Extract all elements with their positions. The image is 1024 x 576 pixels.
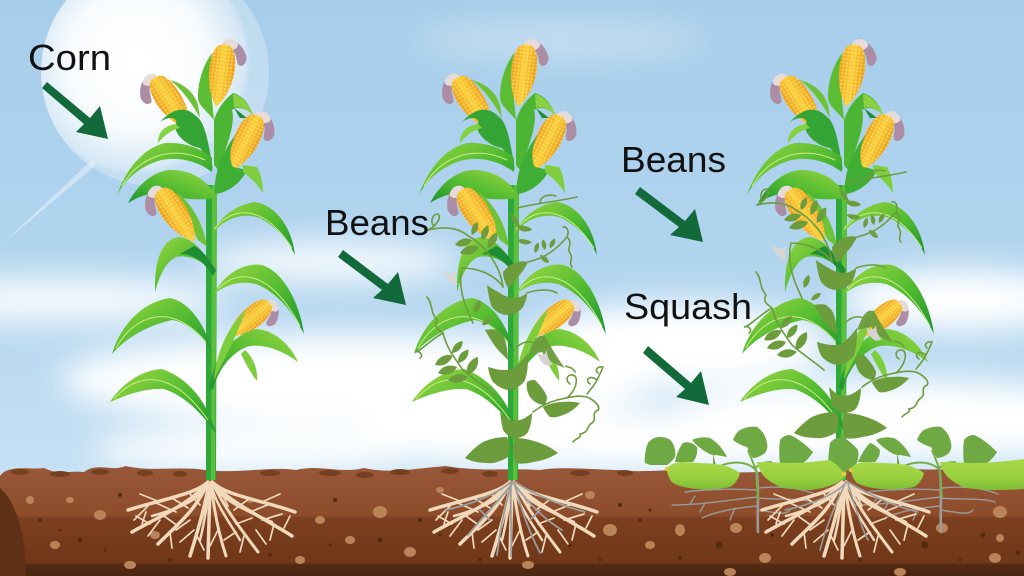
bean vine on second corn [415, 195, 603, 464]
arrow: to beans left [338, 250, 406, 305]
squash plants [645, 427, 1024, 500]
label: Beans left: Beans [325, 202, 429, 243]
arrow: to beans right [635, 187, 703, 242]
sun glow [0, 0, 269, 246]
label: Corn: Corn [28, 37, 111, 78]
plant: corn with beans and squash [740, 37, 934, 558]
squash fruit: cucumbers [665, 459, 1024, 490]
bean roots on second corn [445, 482, 585, 556]
label: Beans right: Beans [621, 139, 726, 180]
plant: corn only [110, 37, 304, 558]
squash roots [672, 472, 998, 532]
roots of first corn [128, 482, 295, 558]
bean vine on third corn [744, 170, 932, 439]
squash leaves [645, 427, 997, 473]
squash stems [720, 450, 956, 500]
bean roots on third corn [785, 482, 918, 550]
arrow: to squash [643, 346, 709, 405]
arrow: to corn [42, 82, 108, 139]
label: Squash: Squash [624, 286, 752, 327]
plant: corn with beans [412, 37, 606, 558]
soil ground [0, 466, 1024, 576]
